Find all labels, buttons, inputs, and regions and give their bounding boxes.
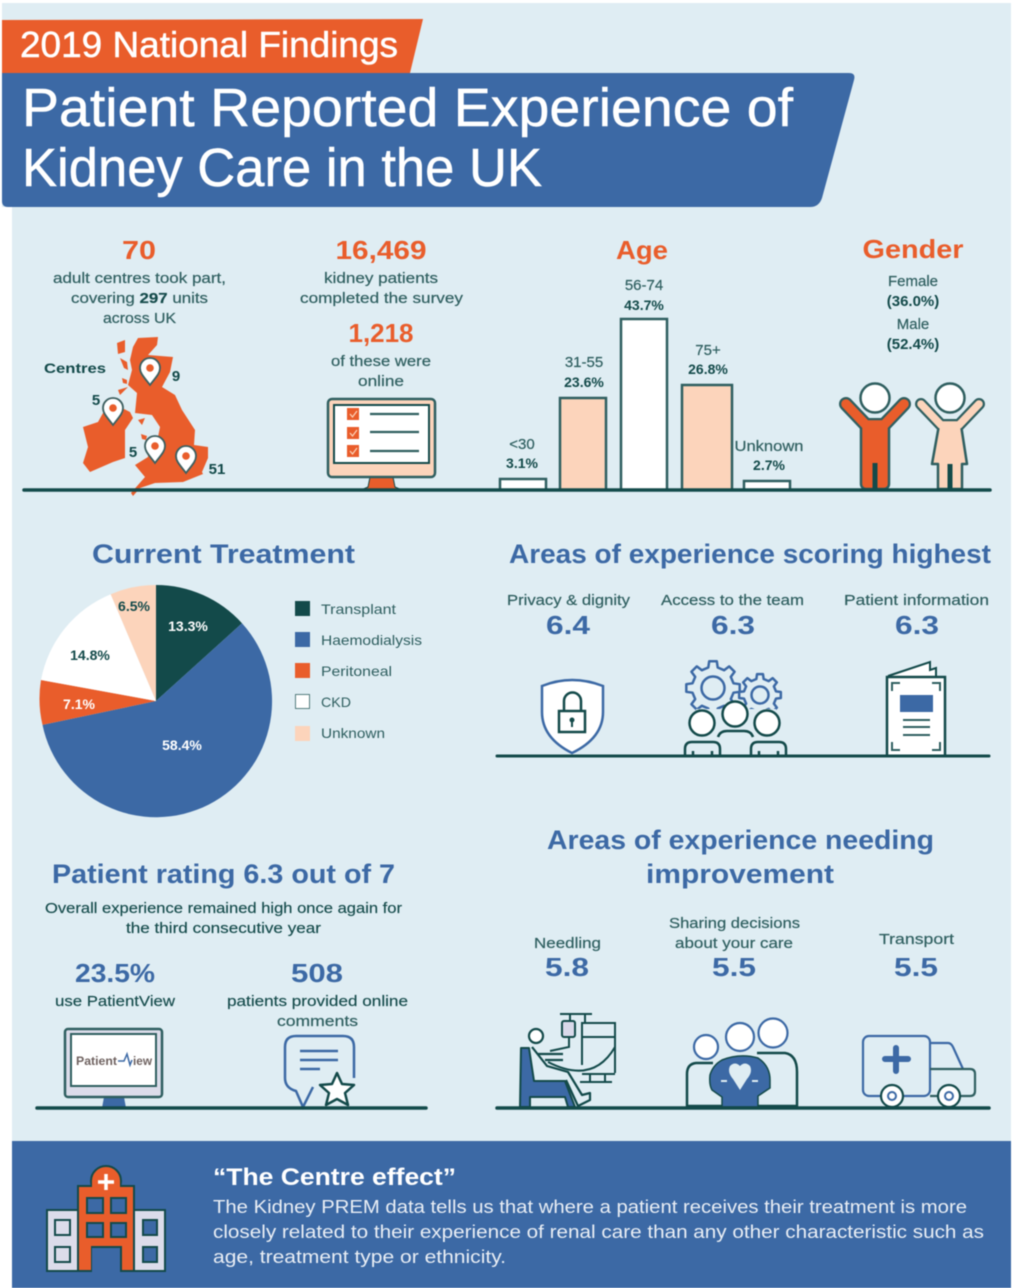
icon: information booklet bbox=[887, 662, 945, 756]
title banner bbox=[2, 73, 854, 207]
map of UK with centre pins bbox=[44, 337, 225, 496]
score: privacy and dignity: 6.4 bbox=[546, 610, 591, 640]
pin: Wales bbox=[145, 436, 165, 463]
bar: under 30: <30 bbox=[509, 436, 535, 453]
gender stats: Male bbox=[897, 316, 929, 333]
score: access to the team bbox=[661, 592, 804, 640]
bar chart: age: Age bbox=[616, 235, 668, 265]
heading: needing improvement: improvement bbox=[646, 859, 834, 889]
text: overall experience: Overall experience remained high once again for bbox=[45, 900, 402, 917]
icon: team with gears bbox=[685, 661, 786, 755]
text: overall experience: the third consecutive year bbox=[126, 920, 321, 937]
stat: 16,469 patients and 1,218 online: kidney patients bbox=[324, 270, 438, 287]
heading: patient rating: Patient rating 6.3 out of 7 bbox=[52, 859, 395, 889]
icon: survey monitor bbox=[328, 399, 435, 490]
score: patient information: Patient information bbox=[844, 592, 989, 609]
stat: 23.5% use PatientView: 23.5% bbox=[75, 958, 155, 988]
score: patient information bbox=[844, 592, 989, 640]
pin: England bbox=[176, 446, 196, 473]
stat: 16,469 patients and 1,218 online: completed the survey bbox=[300, 290, 464, 307]
bar: under 30 bbox=[500, 436, 546, 490]
icon: PatientView monitor: Patient bbox=[76, 1054, 117, 1068]
text: centre effect body bbox=[213, 1197, 984, 1267]
pie chart: current treatment: 14.8% bbox=[70, 647, 110, 663]
text: centre effect body: age, treatment type or ethnicity. bbox=[213, 1247, 506, 1267]
stat: 16,469 patients and 1,218 online: online bbox=[358, 373, 404, 390]
map of UK with centre pins: 5 bbox=[129, 444, 137, 461]
icon: hospital bbox=[47, 1166, 165, 1272]
score: needling: Needling bbox=[534, 935, 601, 952]
bar: under 30: 3.1% bbox=[506, 455, 539, 471]
icon: ambulance bbox=[863, 1036, 975, 1107]
gender stats: (36.0%) bbox=[887, 293, 939, 310]
icon: patient on dialysis bbox=[520, 1014, 615, 1107]
score: needling bbox=[534, 935, 601, 982]
legend: treatment: Haemodialysis bbox=[321, 632, 422, 648]
text: overall experience bbox=[45, 900, 402, 937]
stat: 70 adult centres: covering 297 units bbox=[71, 290, 208, 307]
score: privacy and dignity bbox=[507, 592, 631, 640]
heading: needing improvement bbox=[547, 825, 934, 889]
icon: PatientView monitor: iew bbox=[133, 1054, 153, 1068]
icon: comment bubble with star bbox=[285, 1036, 354, 1107]
score: transport bbox=[879, 931, 955, 982]
map of UK with centre pins: 9 bbox=[172, 368, 180, 385]
gender stats: Gender bbox=[862, 234, 964, 264]
legend: treatment bbox=[295, 601, 422, 741]
gender stats bbox=[862, 234, 964, 353]
score: needling: 5.8 bbox=[545, 952, 589, 982]
gender stats: (52.4%) bbox=[887, 336, 939, 353]
legend: treatment: Transplant bbox=[321, 601, 396, 617]
bar: 56-74: 56-74 bbox=[625, 277, 663, 294]
pie chart: current treatment: 13.3% bbox=[168, 618, 208, 634]
heading: current treatment: Current Treatment bbox=[92, 539, 355, 569]
bar: 31-55 bbox=[560, 354, 606, 490]
bar: 31-55: 23.6% bbox=[564, 374, 604, 390]
text: centre effect heading: “The Centre effect” bbox=[213, 1164, 456, 1191]
icon: PatientView monitor bbox=[65, 1029, 162, 1108]
text: centre effect body: The Kidney PREM data tells us that where a patient receives their treatment is more bbox=[213, 1197, 967, 1217]
bar: unknown bbox=[734, 438, 804, 490]
score: patient information: 6.3 bbox=[895, 610, 939, 640]
bar: 75+ bbox=[682, 342, 732, 490]
stat: 23.5% use PatientView bbox=[55, 958, 175, 1010]
map of UK with centre pins: 5 bbox=[92, 392, 100, 409]
score: access to the team: Access to the team bbox=[661, 592, 804, 609]
stat: 16,469 patients and 1,218 online: 1,218 bbox=[348, 318, 414, 348]
stat: 508 online comments: comments bbox=[277, 1013, 358, 1030]
score: sharing decisions: Sharing decisions bbox=[669, 915, 800, 932]
pie chart: current treatment bbox=[39, 585, 272, 817]
pie chart: current treatment: 6.5% bbox=[118, 598, 151, 614]
stat: 16,469 patients and 1,218 online: 16,469 bbox=[336, 235, 426, 265]
stat: 508 online comments: patients provided online bbox=[227, 993, 408, 1010]
orange banner: 2019 National Findings: 2019 National Findings bbox=[20, 24, 398, 65]
map of UK with centre pins: Centres bbox=[44, 360, 106, 376]
bar: 56-74 bbox=[621, 277, 667, 490]
stat: 16,469 patients and 1,218 online bbox=[300, 235, 464, 390]
stat: 70 adult centres: across UK bbox=[103, 310, 176, 327]
bar: unknown: 2.7% bbox=[753, 457, 786, 473]
gender stats: Female bbox=[888, 273, 938, 290]
stat: 70 adult centres: adult centres took part, bbox=[53, 270, 226, 287]
text: centre effect body: closely related to their experience of renal care than any other characteristic such as bbox=[213, 1222, 984, 1242]
score: transport: Transport bbox=[879, 931, 955, 948]
stat: 508 online comments: 508 bbox=[291, 958, 343, 988]
panel: the centre effect bbox=[12, 1141, 1011, 1288]
score: sharing decisions: 5.5 bbox=[712, 952, 756, 982]
score: privacy and dignity: Privacy & dignity bbox=[507, 592, 631, 609]
pie chart: current treatment: 7.1% bbox=[63, 696, 96, 712]
title banner: Patient Reported Experience of bbox=[22, 78, 794, 138]
score: sharing decisions: about your care bbox=[675, 935, 793, 952]
pin: Scotland bbox=[140, 358, 160, 385]
legend: treatment: CKD bbox=[321, 694, 351, 710]
bar: 75+: 75+ bbox=[695, 342, 721, 359]
stat: 70 adult centres bbox=[53, 235, 226, 327]
bar chart: age bbox=[500, 235, 804, 490]
bar: 56-74: 43.7% bbox=[624, 297, 664, 313]
stat: 508 online comments bbox=[227, 958, 408, 1030]
stat: 23.5% use PatientView: use PatientView bbox=[55, 993, 175, 1010]
score: access to the team: 6.3 bbox=[711, 610, 755, 640]
stat: 16,469 patients and 1,218 online: of these were bbox=[331, 353, 431, 370]
icon: male figure bbox=[846, 384, 904, 489]
score: transport: 5.5 bbox=[894, 952, 938, 982]
title banner: Kidney Care in the UK bbox=[22, 138, 542, 198]
icon: family with heart bbox=[687, 1018, 797, 1107]
legend: treatment: Unknown bbox=[321, 725, 385, 741]
stat: 70 adult centres: 70 bbox=[122, 235, 156, 265]
map of UK with centre pins: 51 bbox=[209, 461, 225, 478]
header banners bbox=[2, 19, 854, 207]
legend: treatment: Peritoneal bbox=[321, 663, 392, 679]
icon: female figure bbox=[921, 384, 979, 489]
score: sharing decisions bbox=[669, 915, 800, 982]
pie chart: current treatment: 58.4% bbox=[162, 737, 202, 753]
orange banner: 2019 National Findings bbox=[2, 19, 423, 73]
pin: Northern Ireland bbox=[103, 398, 123, 425]
bar: 31-55: 31-55 bbox=[565, 354, 603, 371]
bar: unknown: Unknown bbox=[734, 438, 804, 455]
heading: scoring highest: Areas of experience scoring highest bbox=[509, 539, 991, 569]
heading: needing improvement: Areas of experience needing bbox=[547, 825, 934, 855]
bar: 75+: 26.8% bbox=[688, 361, 728, 377]
icon: shield with padlock bbox=[542, 680, 603, 753]
